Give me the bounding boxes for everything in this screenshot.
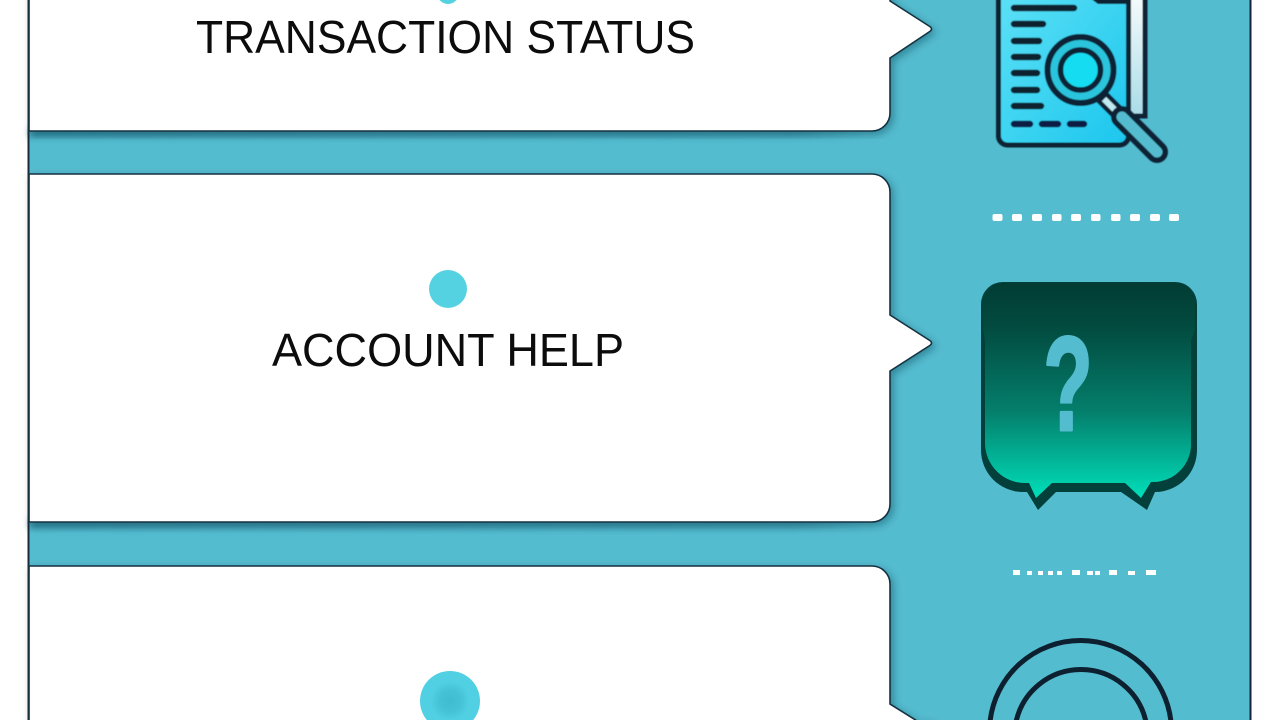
magnifier handle <box>1102 97 1157 152</box>
dot: transaction status <box>437 0 459 4</box>
icon: question speech bubble <box>981 282 1197 510</box>
dotted divider upper <box>992 214 1179 221</box>
icon: document with magnifier <box>998 0 1157 152</box>
dot: third card <box>420 671 480 720</box>
dotted divider lower <box>1013 570 1156 575</box>
panel: transaction status card <box>29 0 932 131</box>
panel: third card <box>29 566 930 720</box>
panel: account help card <box>29 174 932 522</box>
question mark: ? <box>1043 310 1093 459</box>
heading: transaction status: TRANSACTION STATUS <box>196 11 695 63</box>
dot: account help <box>429 270 467 308</box>
icon: concentric rings <box>990 641 1171 720</box>
heading: account help: ACCOUNT HELP <box>272 324 624 376</box>
